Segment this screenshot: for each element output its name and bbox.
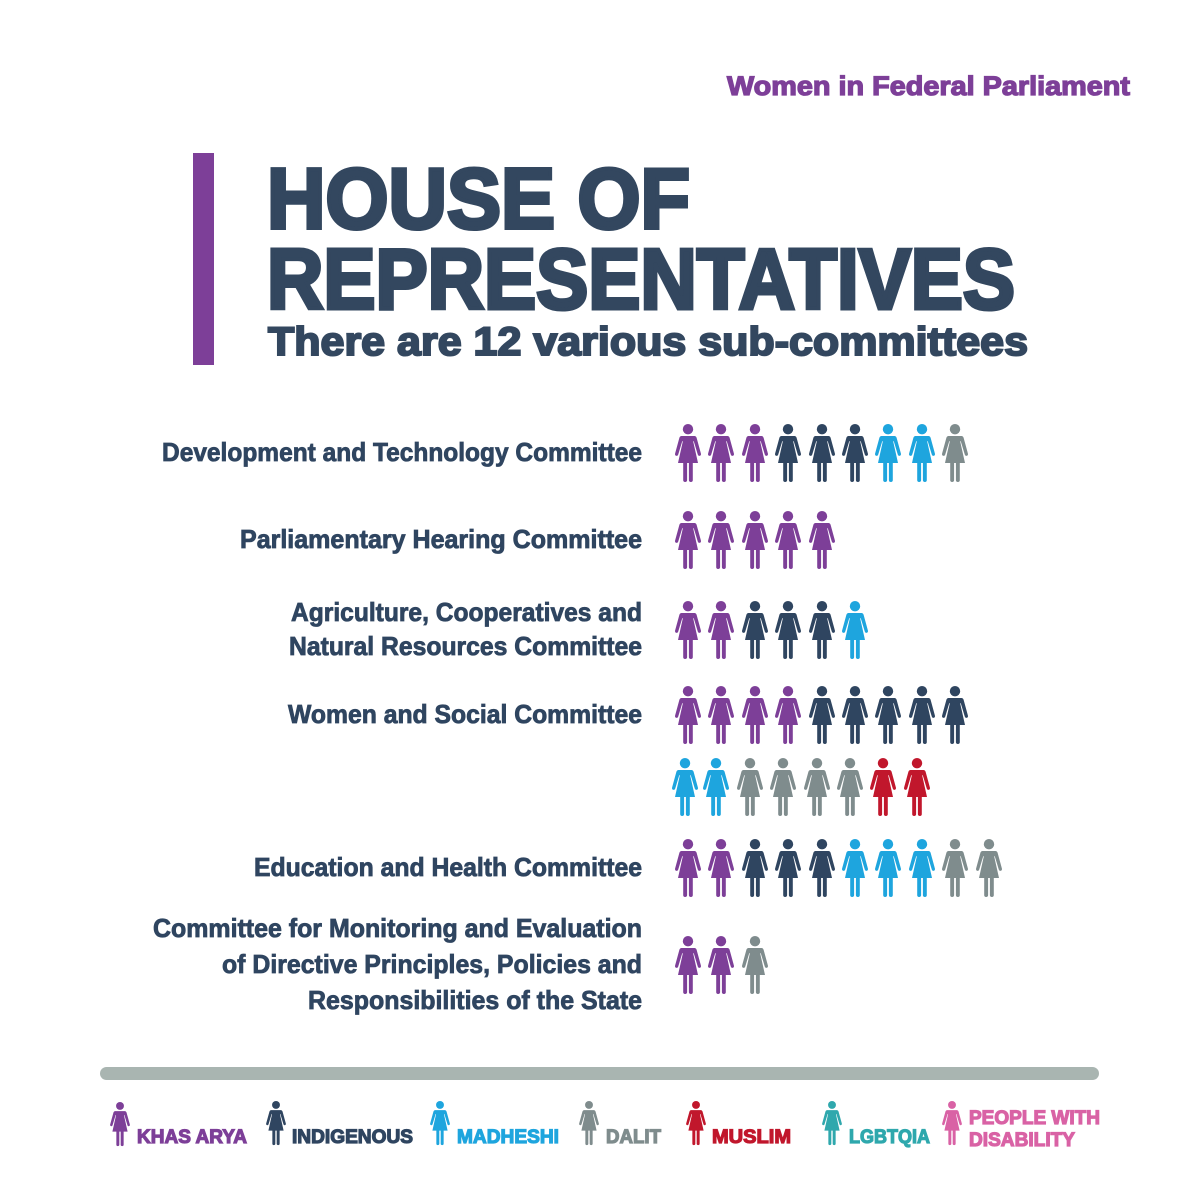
legend item: Khas Arya (110, 1102, 247, 1148)
committee name: Development and Technology Committee (162, 437, 642, 467)
committee name (153, 913, 642, 1015)
legend item: Dalit: DALIT (606, 1126, 661, 1148)
committee name: Committee for Monitoring and Evaluation (153, 913, 642, 943)
legend item: LGBTQIA: LGBTQIA (849, 1126, 930, 1148)
legend item: People with disability: DISABILITY (969, 1129, 1075, 1151)
pictogram row (675, 601, 868, 659)
legend item: People with disability: PEOPLE WITH (969, 1107, 1100, 1129)
committee row: Development and Technology (162, 424, 968, 482)
legend item: Madheshi: MADHESHI (457, 1126, 559, 1148)
legend item: Muslim (686, 1101, 791, 1148)
committee row: Monitoring and Evaluation (153, 913, 768, 1015)
title: HOUSE OF (267, 152, 690, 247)
legend (110, 1101, 1100, 1151)
committee name: Responsibilities of the State (308, 985, 642, 1015)
pictogram rows (672, 686, 968, 816)
pictogram row (675, 936, 768, 994)
legend divider bar (100, 1067, 1099, 1080)
title (267, 152, 1015, 328)
committee row: Agriculture (289, 597, 868, 661)
legend item: Indigenous (266, 1101, 413, 1148)
title: REPRESENTATIVES (267, 232, 1015, 328)
committee name: Women and Social Committee (288, 699, 642, 729)
pictogram row (675, 839, 1002, 897)
subtitle: There are 12 various sub-committees (268, 320, 1028, 364)
committee row: Women and Social (288, 686, 968, 816)
legend item: Khas Arya: KHAS ARYA (137, 1126, 247, 1148)
committee row: Parliamentary Hearing (240, 511, 835, 569)
legend item: Dalit (579, 1101, 661, 1148)
legend item: People with disability (942, 1101, 1100, 1151)
committee name: Agriculture, Cooperatives and (291, 597, 642, 627)
committee row: Education and Health (254, 839, 1002, 897)
pictogram row (675, 424, 968, 482)
committee name: Natural Resources Committee (289, 631, 642, 661)
committee name (289, 597, 642, 661)
committee name: Education and Health Committee (254, 852, 642, 882)
legend item: Madheshi (430, 1101, 559, 1148)
accent bar (193, 153, 214, 365)
committee name: of Directive Principles, Policies and (222, 949, 642, 979)
header label: Women in Federal Parliament (727, 71, 1130, 101)
legend item: LGBTQIA (822, 1101, 930, 1148)
committee name: Parliamentary Hearing Committee (240, 524, 642, 554)
legend item: Indigenous: INDIGENOUS (292, 1126, 413, 1148)
legend item: Muslim: MUSLIM (712, 1126, 791, 1148)
pictogram row (675, 511, 835, 569)
